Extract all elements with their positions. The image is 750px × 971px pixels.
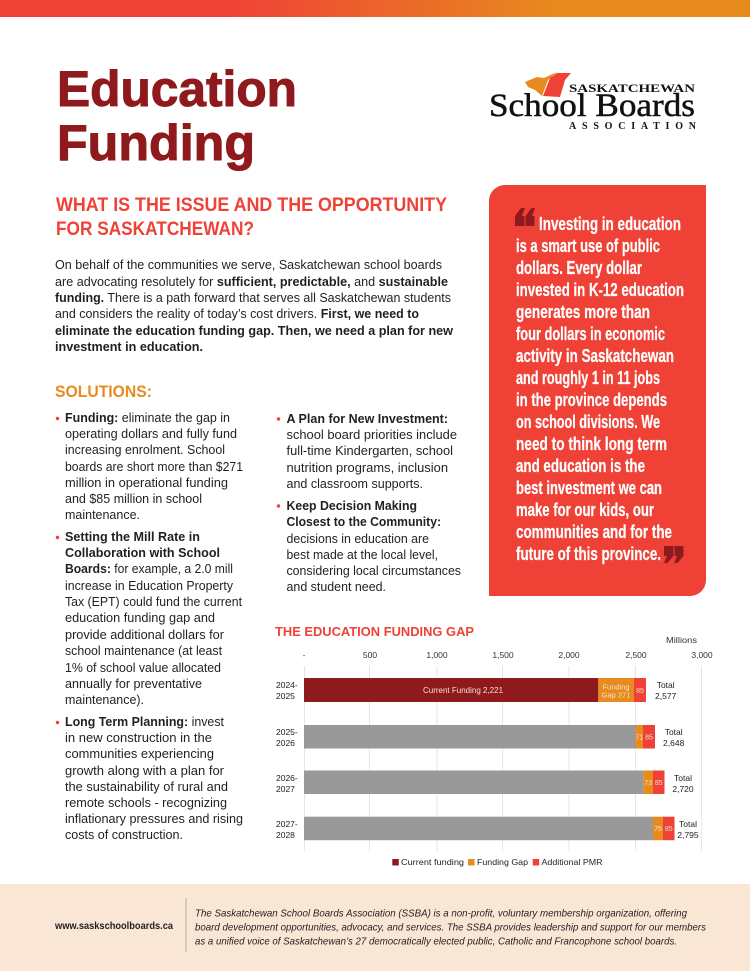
intro paragraph: are advocating resolutely for sufficient, predictable, and sustainable [55,274,448,289]
solutions right column: decisions in education are [286,531,429,546]
logo: Saskatchewan School Boards Association: School Boards [489,88,695,124]
solutions left column: Long Term Planning: invest [65,714,224,729]
icon: opening quote mark [515,208,535,226]
heading: issue and opportunity: WHAT IS THE ISSUE AND THE OPPORTUNITY [56,195,447,216]
solutions left column [56,410,243,842]
bar value labels: 85 [655,780,663,787]
solutions left column: million in operational funding [65,475,228,490]
intro paragraph: investment in education. [55,339,203,354]
x axis labels: 2,000 [558,650,580,660]
total labels: 2,720 [672,784,694,794]
solutions right column: considering local circumstances [286,563,461,578]
chart: the education funding gap [275,625,713,867]
panel: quote: need to think long term [516,434,667,454]
intro paragraph: funding. There is a path forward that serves all Saskatchewan students [55,290,451,305]
bar value labels: Current Funding 2,221 [423,686,504,695]
title: Funding [57,115,255,171]
panel: quote: dollars. Every dollar [516,258,642,278]
bar value labels: Gap 271 [602,690,630,700]
solutions left column: the sustainability of rural and [65,779,228,794]
bar value labels: 85 [636,688,644,695]
intro paragraph [55,257,454,354]
bar 2024-2025 [304,678,646,702]
solutions left column: increase in Education Property [65,578,233,593]
solutions right column [277,411,461,594]
logo: Saskatchewan School Boards Association: SASKATCHEWAN [569,83,696,95]
bar 2027-2028 [304,817,674,840]
x axis labels [303,650,713,660]
bar 2025-2026 [304,725,655,748]
year labels: 2025- [276,727,298,737]
solutions right column: best made at the local level, [286,547,438,562]
solutions left column: boards are short more than $271 [65,459,243,474]
website: www.saskschoolboards.ca [54,920,173,932]
bar value labels: Funding [602,682,630,692]
heading: issue and opportunity [56,195,447,240]
panel: quote: four dollars in economic [516,324,665,344]
panel: quote: Investing in education [539,214,681,234]
footer band [0,884,750,971]
solutions right column: A Plan for New Investment: [286,411,448,426]
panel: quote: on school divisions. We [516,412,660,432]
title: Education [57,61,297,117]
solutions left column: and $85 million in school [65,491,202,506]
solutions left column: costs of construction. [65,827,183,842]
bar value labels [423,682,673,833]
solutions left column: Collaboration with School [65,545,220,560]
solutions left column: Tax (EPT) could fund the current [65,594,242,609]
total labels [655,680,699,840]
solutions left column: Boards: for example, a 2.0 mill [65,561,233,576]
solutions left column: maintenance). [65,692,144,707]
x axis labels: 1,000 [426,650,448,660]
icon: closing quote mark [664,546,684,563]
total labels: 2,577 [655,691,677,701]
x axis labels: 500 [363,650,377,660]
solutions right column: full-time Kindergarten, school [286,443,453,458]
solutions left column: inflationary pressures and rising [65,811,243,826]
solutions left column: in new construction in the [65,730,212,745]
panel: quote: best investment we can [516,478,662,498]
solutions left column: education funding gap and [65,610,215,625]
intro paragraph: On behalf of the communities we serve, Saskatchewan school boards [55,257,442,272]
solutions left column: remote schools - recognizing [65,795,227,810]
bar value labels: 71 [635,734,643,742]
logo: Saskatchewan School Boards Association [489,72,697,132]
year labels: 2027 [276,784,295,794]
bar 2026-2027 [304,770,664,794]
solutions right column: nutrition programs, inclusion [286,460,448,475]
heading: issue and opportunity: FOR SASKATCHEWAN? [56,219,254,240]
legend: Funding Gap [477,857,528,867]
year labels: 2027- [276,819,298,829]
year labels: 2026- [276,773,298,783]
panel: quote: make for our kids, our [516,500,654,520]
total labels: Total [679,819,697,829]
intro paragraph: eliminate the education funding gap. Then, we need a plan for new [55,323,454,338]
bar value labels: 85 [665,826,673,833]
total labels: 2,795 [677,830,699,840]
solutions left column: Setting the Mill Rate in [65,529,200,544]
organization description: as a unified voice of Saskatchewan’s 27 democratically elected public, Catholic and Francophone school boards. [195,936,677,948]
year labels: 2024- [276,680,298,690]
year labels: 2028 [276,830,295,840]
solutions right column: Keep Decision Making [286,498,417,513]
x axis labels: 3,000 [691,650,713,660]
panel: quote: activity in Saskatchewan [516,346,674,366]
heading: solutions: SOLUTIONS: [55,383,152,401]
solutions left column: operating dollars and fully fund [65,426,237,441]
top gradient band [0,0,750,17]
total labels: Total [665,727,683,737]
organization description: The Saskatchewan School Boards Association (SSBA) is a non-profit, voluntary membership organization, offering [195,908,687,920]
solutions left column: maintenance. [65,507,140,522]
solutions left column: communities experiencing [65,746,214,761]
organization description [195,908,707,948]
legend: Additional PMR [542,857,602,867]
panel: quote: in the province depends [516,390,667,410]
solutions left column: school maintenance (at least [65,643,222,658]
title [57,61,297,171]
panel: quote: future of this province. [516,544,661,564]
panel: quote: communities and for the [516,522,672,542]
solutions right column: Closest to the Community: [286,514,441,529]
x axis labels: - [303,650,306,660]
intro paragraph: and considers the reality of today’s cost drivers. First, we need to [55,306,419,321]
year labels: 2026 [276,738,295,748]
solutions right column: school board priorities include [286,427,457,442]
solutions left column: increasing enrolment. School [65,442,225,457]
solutions left column: annually for preventative [65,676,202,691]
panel: quote: and roughly 1 in 11 jobs [516,368,660,388]
total labels: 2,648 [663,738,685,748]
total labels: Total [657,680,675,690]
total labels: Total [674,773,692,783]
panel: quote [489,185,706,596]
solutions right column: and classroom supports. [286,476,423,491]
panel: quote: and education is the [516,456,645,476]
legend [392,857,602,867]
unit label: Millions [666,635,697,645]
logo: Saskatchewan School Boards Association: ASSOCIATION [569,121,697,132]
x axis labels: 2,500 [625,650,647,660]
solutions left column: 1% of school value allocated [65,660,221,675]
panel: quote: invested in K-12 education [516,280,684,300]
panel: quote: generates more than [516,302,650,322]
solutions left column: growth along with a plan for [65,763,225,778]
bar value labels: 85 [645,734,653,742]
bar value labels: 73 [644,780,652,787]
solutions left column: Funding: eliminate the gap in [65,410,230,425]
year labels: 2025 [276,691,295,701]
solutions left column: provide additional dollars for [65,627,225,642]
panel: quote: is a smart use of public [516,236,660,256]
solutions right column: and student need. [286,579,386,594]
bar value labels: 75 [654,826,662,833]
year labels [276,680,298,840]
legend: Current funding [401,857,464,867]
organization description: board development opportunities, advocacy, and services. The SSBA provides leadership and support for our members [195,922,707,934]
x axis labels: 1,500 [492,650,514,660]
chart heading: THE EDUCATION FUNDING GAP [275,625,474,639]
